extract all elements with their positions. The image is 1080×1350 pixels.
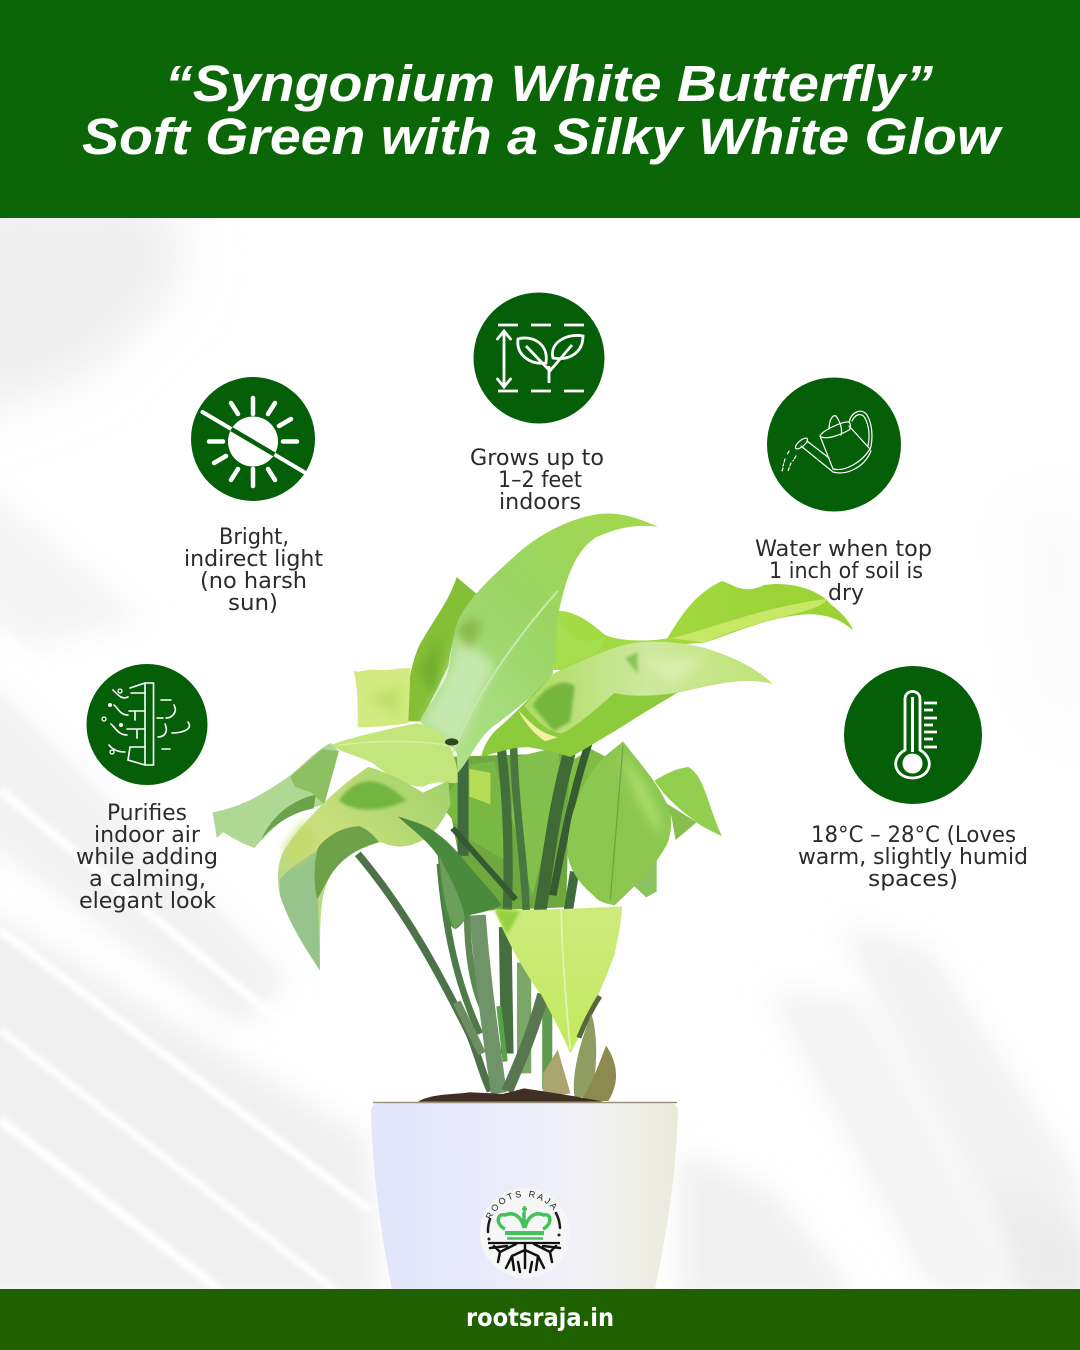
plant bbox=[213, 513, 853, 1102]
front leaves bbox=[213, 513, 772, 1097]
text: light bbox=[184, 524, 323, 616]
text: watering: dry bbox=[828, 580, 864, 606]
text: height: indoors bbox=[499, 489, 581, 515]
text: air purifying: indoor air bbox=[94, 822, 201, 848]
logo text: ROOTS RAJA bbox=[486, 1190, 556, 1220]
icon: thermometer bbox=[844, 666, 982, 804]
text: watering: 1 inch of soil is bbox=[769, 558, 923, 584]
text: air purifying: Purifies bbox=[107, 800, 187, 826]
soil and dry sheaths bbox=[419, 1046, 616, 1102]
logo sticker bbox=[480, 1188, 562, 1278]
title: “Syngonium White Butterfly” bbox=[165, 55, 934, 112]
text: light: Bright, bbox=[219, 524, 289, 550]
text: light: (no harsh bbox=[200, 568, 307, 594]
footer url: rootsraja.in bbox=[466, 1303, 614, 1332]
icon: air purifier bbox=[86, 664, 208, 785]
text: air purifying: elegant look bbox=[79, 888, 216, 914]
icon: no direct sun bbox=[191, 377, 315, 501]
pot bbox=[371, 1102, 678, 1289]
title: Soft Green with a Silky White Glow bbox=[82, 108, 1004, 165]
header band bbox=[0, 0, 1080, 218]
text: temperature bbox=[798, 822, 1028, 892]
text: height: Grows up to bbox=[470, 445, 604, 471]
text: temperature: spaces) bbox=[868, 866, 958, 892]
text: light: sun) bbox=[228, 590, 278, 616]
crown bbox=[498, 1206, 550, 1238]
text: air purifying: a calming, bbox=[89, 866, 206, 892]
icon: plant height bbox=[474, 292, 604, 424]
text: height: 1–2 feet bbox=[498, 467, 582, 493]
title bbox=[82, 55, 1004, 165]
text: watering: Water when top bbox=[755, 536, 932, 562]
footer band bbox=[0, 1289, 1080, 1350]
text: air purifying bbox=[76, 800, 218, 914]
text: watering bbox=[755, 536, 932, 606]
text: height bbox=[470, 445, 604, 515]
icon: watering can bbox=[767, 378, 901, 512]
back leaves bbox=[354, 577, 853, 911]
text: air purifying: while adding bbox=[76, 844, 218, 870]
text: temperature: 18°C – 28°C (Loves bbox=[811, 822, 1016, 848]
text: light: indirect light bbox=[184, 546, 323, 572]
roots bbox=[490, 1243, 560, 1272]
stems bbox=[358, 741, 589, 1093]
text: temperature: warm, slightly humid bbox=[798, 844, 1028, 870]
